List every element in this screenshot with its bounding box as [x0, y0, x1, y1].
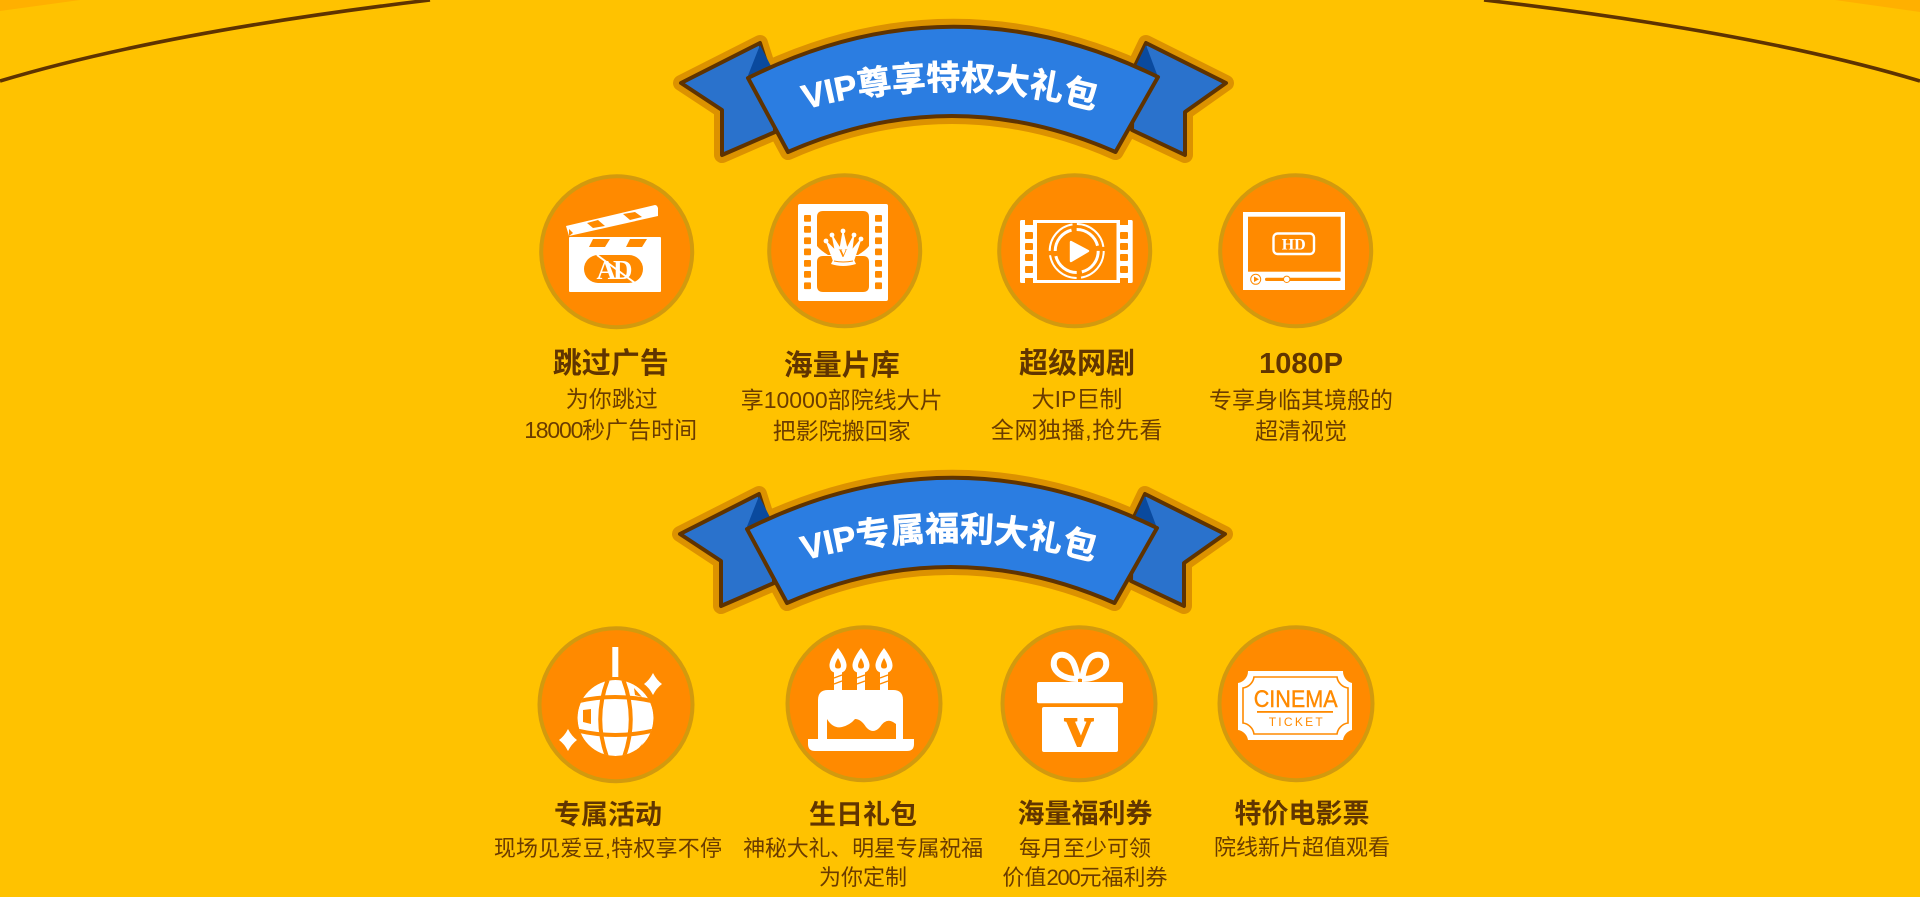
top right arc — [1484, 0, 1920, 81]
icon: HD video player — [1220, 175, 1371, 326]
heading: 海量片库 — [784, 349, 900, 382]
icon: cinema ticket — [1220, 627, 1372, 780]
benefit: 1080P — [1209, 175, 1393, 444]
ribbon title: VIP尊享特权大礼包 — [800, 60, 1098, 110]
icon: gift box: V — [1065, 710, 1094, 754]
heading: 特价电影票 — [1234, 799, 1370, 829]
icon: clapperboard — [541, 176, 692, 327]
icon: clapperboard: AD — [596, 255, 632, 285]
heading: 超级网剧 — [1019, 347, 1135, 380]
ribbon banner: VIP专属福利大礼包 — [672, 470, 1233, 614]
heading: 生日礼包 — [809, 800, 917, 830]
benefit: 生日礼包 — [743, 627, 983, 890]
benefit: 跳过广告 — [524, 176, 697, 443]
benefit: 超级网剧 — [991, 175, 1163, 443]
heading: 海量福利券 — [1018, 799, 1152, 829]
description: 每月至少可领 — [1019, 836, 1151, 861]
description — [524, 386, 697, 443]
icon: video reel with play button — [999, 175, 1150, 326]
description — [743, 836, 983, 890]
description — [741, 387, 943, 444]
ribbon title: VIP专属福利大礼包 — [798, 512, 1096, 562]
description: 为你定制 — [819, 865, 907, 890]
description: 神秘大礼、明星专属祝福 — [743, 836, 983, 861]
description: 为你跳过 — [566, 386, 658, 412]
description: 18000秒广告时间 — [524, 417, 697, 443]
benefit: 专属活动 — [494, 628, 722, 861]
description — [1002, 836, 1168, 890]
description: 大IP巨制 — [1032, 386, 1122, 412]
top left corner accent — [0, 0, 80, 11]
icon: birthday cake — [788, 627, 940, 780]
description: 把影院搬回家 — [773, 418, 911, 444]
description: 全网独播,抢先看 — [991, 417, 1163, 443]
benefit: 海量福利券 — [1002, 627, 1168, 890]
icon: disco ball — [540, 628, 692, 781]
top left arc — [0, 0, 430, 81]
benefit: 特价电影票 — [1214, 627, 1390, 860]
icon: cinema ticket: CINEMA — [1254, 686, 1338, 713]
description: 超清视觉 — [1255, 418, 1347, 444]
icon: HD video player: HD — [1282, 236, 1306, 254]
description: 专享身临其境般的 — [1209, 387, 1393, 413]
icon: gift box — [1002, 627, 1156, 780]
heading: 专属活动 — [554, 800, 662, 830]
icon: film strip with crown: V — [839, 246, 848, 260]
top right corner accent — [1835, 0, 1920, 12]
description — [1209, 387, 1393, 444]
description: 享10000部院线大片 — [741, 387, 943, 413]
description: 院线新片超值观看 — [1214, 835, 1390, 860]
description: 现场见爱豆,特权享不停 — [494, 836, 722, 861]
heading: 跳过广告 — [553, 347, 669, 380]
heading: 1080P — [1259, 348, 1343, 380]
description — [991, 386, 1163, 443]
icon: film strip with crown — [769, 175, 920, 326]
icon: cinema ticket: TICKET — [1269, 715, 1323, 729]
ribbon banner: VIP尊享特权大礼包 — [673, 18, 1234, 163]
description: 价值200元福利券 — [1002, 865, 1168, 890]
benefit: 海量片库 — [741, 175, 943, 444]
